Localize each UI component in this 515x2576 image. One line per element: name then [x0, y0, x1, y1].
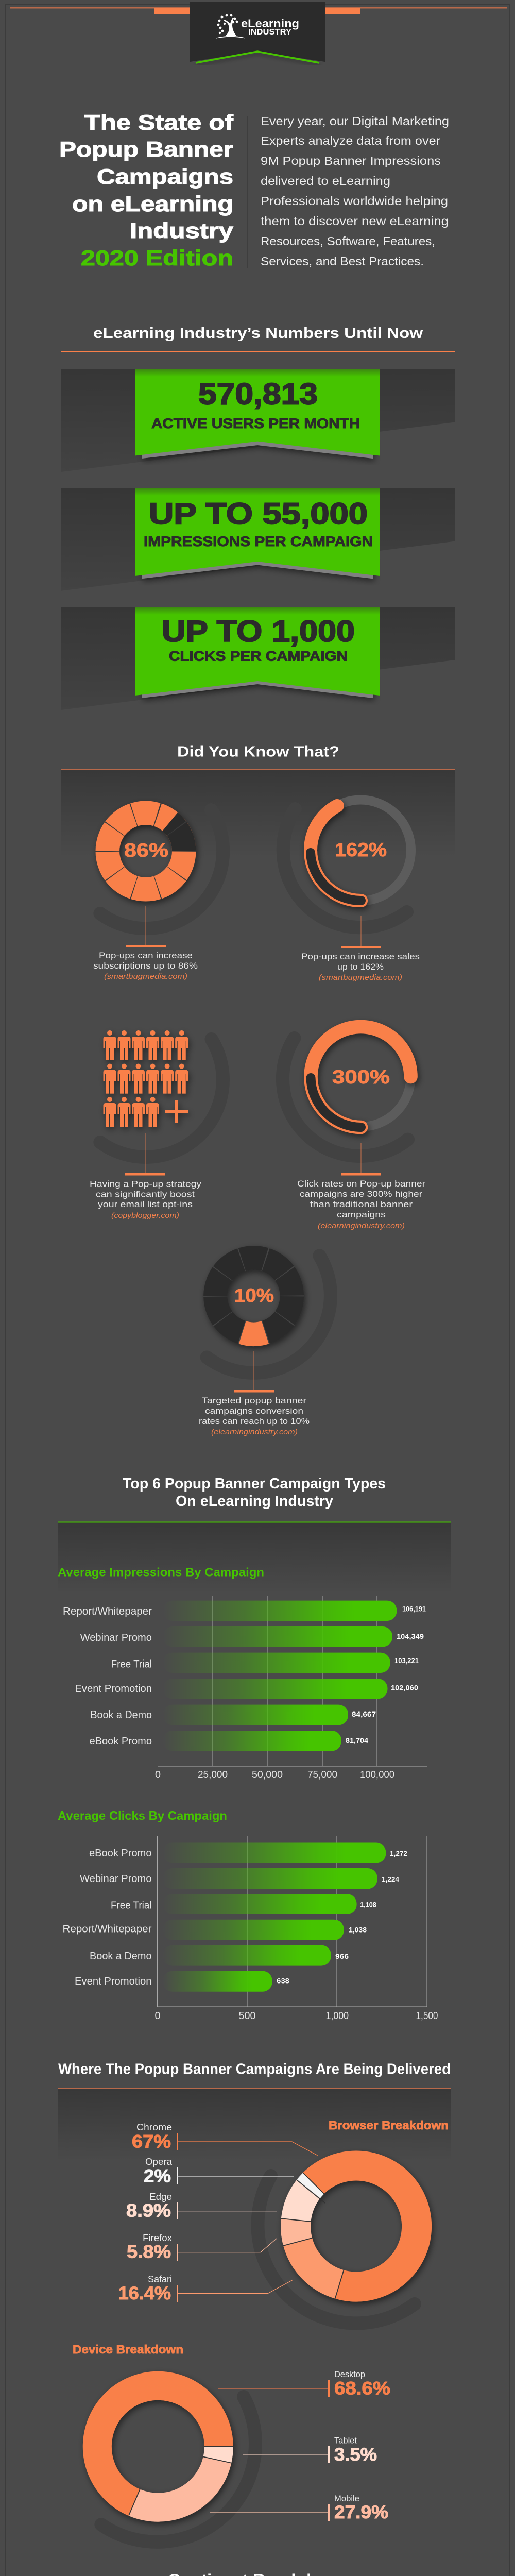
callout: edge: 8.9%: [126, 2201, 171, 2221]
stat: 162% sales ring: up to 162%: [337, 962, 384, 972]
stat: 86% subscriptions donut: [92, 797, 223, 981]
stat banner: clicks: [61, 607, 455, 710]
stat: people icons email opt-ins: (copyblogger.com): [111, 1211, 179, 1220]
bar chart: average impressions: Free Trial: [111, 1659, 152, 1670]
logo: eLearning Industry: INDUSTRY: [248, 28, 291, 37]
stat: 162% sales ring: [283, 800, 420, 982]
bar chart: average impressions: 84,667: [352, 1710, 376, 1718]
stat banner: impressions: UP TO 55,000: [149, 497, 368, 531]
bar chart: average clicks: 1,108: [360, 1901, 376, 1909]
panel: browser breakdown: [118, 2119, 449, 2323]
callout: safari: 16.4%: [118, 2283, 171, 2303]
stat banner: active users: [61, 369, 455, 472]
bar chart: average clicks: Webinar Promo: [80, 1873, 151, 1885]
callout: chrome: 67%: [132, 2131, 171, 2151]
bar chart: average impressions: Event Promotion: [75, 1683, 152, 1694]
callout: safari: Safari: [148, 2274, 172, 2284]
bar chart: average impressions: Book a Demo: [90, 1709, 152, 1721]
callout: mobile: 27.9%: [334, 2502, 388, 2522]
stat: 86% subscriptions donut: 86%: [124, 840, 168, 861]
heading: average impressions: Average Impressions By Campaign: [58, 1565, 264, 1579]
stat: 162% sales ring: (smartbugmedia.com): [319, 973, 402, 982]
stat: 300% click rates ring: 300%: [332, 1066, 390, 1088]
stat banner: active users: 570,813: [198, 378, 318, 411]
stat: 162% sales ring: Pop-ups can increase sales: [301, 952, 420, 961]
heading: browser breakdown: Browser Breakdown: [329, 2119, 449, 2132]
bar chart: average clicks: 1,224: [382, 1876, 399, 1884]
bar chart: average impressions: 100,000: [360, 1769, 394, 1781]
intro paragraph: delivered to eLearning: [261, 174, 390, 188]
stat banner: clicks: CLICKS PER CAMPAIGN: [169, 648, 348, 664]
icon: rows of people with plus: [103, 1030, 188, 1127]
bar chart: average impressions: Report/Whitepaper: [63, 1606, 152, 1617]
callout: safari: [118, 2274, 293, 2303]
title: on eLearning: [72, 192, 233, 216]
heading: where delivered: [58, 2061, 451, 2090]
callout: opera: 2%: [144, 2166, 171, 2186]
bar chart: average impressions: 75,000: [307, 1769, 337, 1781]
callout: chrome: Chrome: [136, 2122, 172, 2132]
bar chart: average clicks: 1,038: [349, 1926, 367, 1934]
heading: average clicks: Average Clicks By Campaign: [58, 1809, 227, 1822]
bar chart: average clicks: eBook Promo: [89, 1848, 151, 1859]
intro paragraph: Experts analyze data from over: [261, 134, 440, 147]
panel: device breakdown: [73, 2343, 390, 2542]
stat banner: impressions: [61, 488, 455, 591]
intro paragraph: Every year, our Digital Marketing: [261, 114, 449, 128]
callout: desktop: 68.6%: [334, 2379, 390, 2399]
stat: 10% conversion donut: (elearningindustry.com): [211, 1428, 298, 1436]
bar chart: average clicks: Free Trial: [111, 1900, 151, 1911]
donut: devices: [78, 2367, 238, 2526]
stat: 300% click rates ring: [283, 1027, 426, 1230]
stat: 300% click rates ring: Click rates on Pop-up banner: [297, 1179, 426, 1189]
stat: 86% subscriptions donut: Pop-ups can increase: [99, 951, 193, 960]
stat: people icons email opt-ins: [90, 1030, 223, 1220]
stat: 10% conversion donut: campaigns conversion: [205, 1406, 303, 1416]
logo: eLearning Industry: [216, 14, 299, 39]
title: 2020 Edition: [81, 246, 233, 270]
title: Campaigns: [97, 164, 233, 189]
heading: did you know: Did You Know That?: [177, 744, 339, 760]
title: Popup Banner: [59, 137, 233, 161]
stat: 10% conversion donut: rates can reach up to 10%: [199, 1417, 310, 1426]
bar chart: average impressions: 104,349: [397, 1633, 424, 1640]
title: [59, 110, 234, 270]
callout: opera: [144, 2157, 294, 2186]
bar chart: average impressions: 103,221: [394, 1657, 419, 1665]
callout: desktop: [218, 2369, 390, 2399]
title: Industry: [130, 218, 234, 243]
bar chart: average impressions: 106,191: [402, 1605, 426, 1613]
heading: top 6 campaign types: Top 6 Popup Banner Campaign Types: [123, 1476, 386, 1492]
heading: top 6 campaign types: [123, 1476, 386, 1510]
bar chart: average clicks: Event Promotion: [75, 1976, 151, 1987]
bar chart: average impressions: 102,060: [391, 1684, 418, 1692]
stat: 10% conversion donut: Targeted popup banner: [202, 1396, 307, 1405]
bar chart: average clicks: Book a Demo: [90, 1951, 151, 1962]
bar chart: average impressions: 25,000: [198, 1769, 228, 1781]
stat banner: impressions: IMPRESSIONS PER CAMPAIGN: [144, 534, 373, 549]
callout: chrome: [132, 2122, 318, 2156]
stat: people icons email opt-ins: can significantly boost: [96, 1190, 195, 1199]
callout: tablet: 3.5%: [334, 2445, 377, 2465]
stat: 300% click rates ring: (elearningindustry.com): [318, 1222, 405, 1230]
bar chart: average clicks: Report/Whitepaper: [63, 1924, 152, 1935]
header banner with logo: [10, 2, 507, 63]
bar chart: average clicks: 1,000: [325, 2010, 349, 2022]
heading: device breakdown: Device Breakdown: [73, 2343, 183, 2356]
logo: eLearning Industry: eLearning: [241, 17, 299, 30]
stat banner: clicks: UP TO 1,000: [162, 615, 355, 648]
bar chart: average impressions: eBook Promo: [90, 1736, 152, 1747]
intro paragraph: them to discover new eLearning: [261, 214, 449, 228]
intro paragraph: Professionals worldwide helping: [261, 194, 448, 208]
stat: 86% subscriptions donut: (smartbugmedia.com): [104, 972, 187, 981]
bar chart: average impressions: [63, 1596, 427, 1781]
bar chart: average impressions: 50,000: [252, 1769, 283, 1781]
intro paragraph: Resources, Software, Features,: [261, 234, 435, 248]
callout: mobile: [210, 2494, 388, 2522]
callout: opera: Opera: [145, 2157, 173, 2167]
bar chart: average clicks: 966: [335, 1953, 349, 1960]
heading: top 6 campaign types: On eLearning Industry: [176, 1493, 333, 1510]
callout: firefox: 5.8%: [127, 2242, 171, 2262]
callout: mobile: Mobile: [334, 2494, 359, 2503]
stat: 10% conversion donut: 10%: [234, 1285, 274, 1306]
intro paragraph: [261, 114, 449, 268]
heading: where delivered: Where The Popup Banner Campaigns Are Being Delivered: [58, 2061, 451, 2078]
intro paragraph: 9M Popup Banner Impressions: [261, 154, 441, 167]
title: The State of: [84, 110, 234, 134]
bar chart: average clicks: 0: [154, 2010, 161, 2022]
stat: 10% conversion donut: [199, 1248, 331, 1436]
intro paragraph: Services, and Best Practices.: [261, 255, 424, 268]
stat: 300% click rates ring: campaigns: [337, 1210, 386, 1219]
bar chart: average clicks: 1,500: [416, 2010, 438, 2022]
heading: numbers: eLearning Industry’s Numbers Until Now: [93, 325, 423, 342]
bar chart: average impressions: Webinar Promo: [80, 1632, 152, 1643]
callout: tablet: [243, 2436, 377, 2465]
callout: edge: [126, 2192, 277, 2221]
bar chart: average clicks: 638: [277, 1977, 290, 1985]
bar chart: average impressions: 0: [155, 1769, 161, 1781]
callout: firefox: Firefox: [143, 2233, 172, 2243]
stat: 162% sales ring: 162%: [335, 839, 387, 860]
stat: 300% click rates ring: than traditional banner: [310, 1200, 413, 1209]
stat: 86% subscriptions donut: subscriptions up to 86%: [93, 961, 198, 971]
donut: browsers: [270, 2141, 442, 2312]
callout: firefox: [127, 2233, 277, 2262]
callout: tablet: Tablet: [334, 2436, 357, 2445]
callout: desktop: Desktop: [334, 2369, 365, 2379]
bar chart: average clicks: [63, 1836, 438, 2022]
callout: edge: Edge: [149, 2192, 172, 2202]
bar chart: average clicks: 1,272: [390, 1850, 407, 1857]
stat: 300% click rates ring: campaigns are 300% higher: [300, 1190, 423, 1199]
bar chart: average impressions: 81,704: [346, 1737, 369, 1744]
bar chart: average clicks: 500: [239, 2010, 255, 2022]
stat: people icons email opt-ins: your email list opt-ins: [98, 1200, 193, 1209]
stat: people icons email opt-ins: Having a Pop-up strategy: [90, 1179, 202, 1189]
stat banner: active users: ACTIVE USERS PER MONTH: [151, 416, 360, 431]
